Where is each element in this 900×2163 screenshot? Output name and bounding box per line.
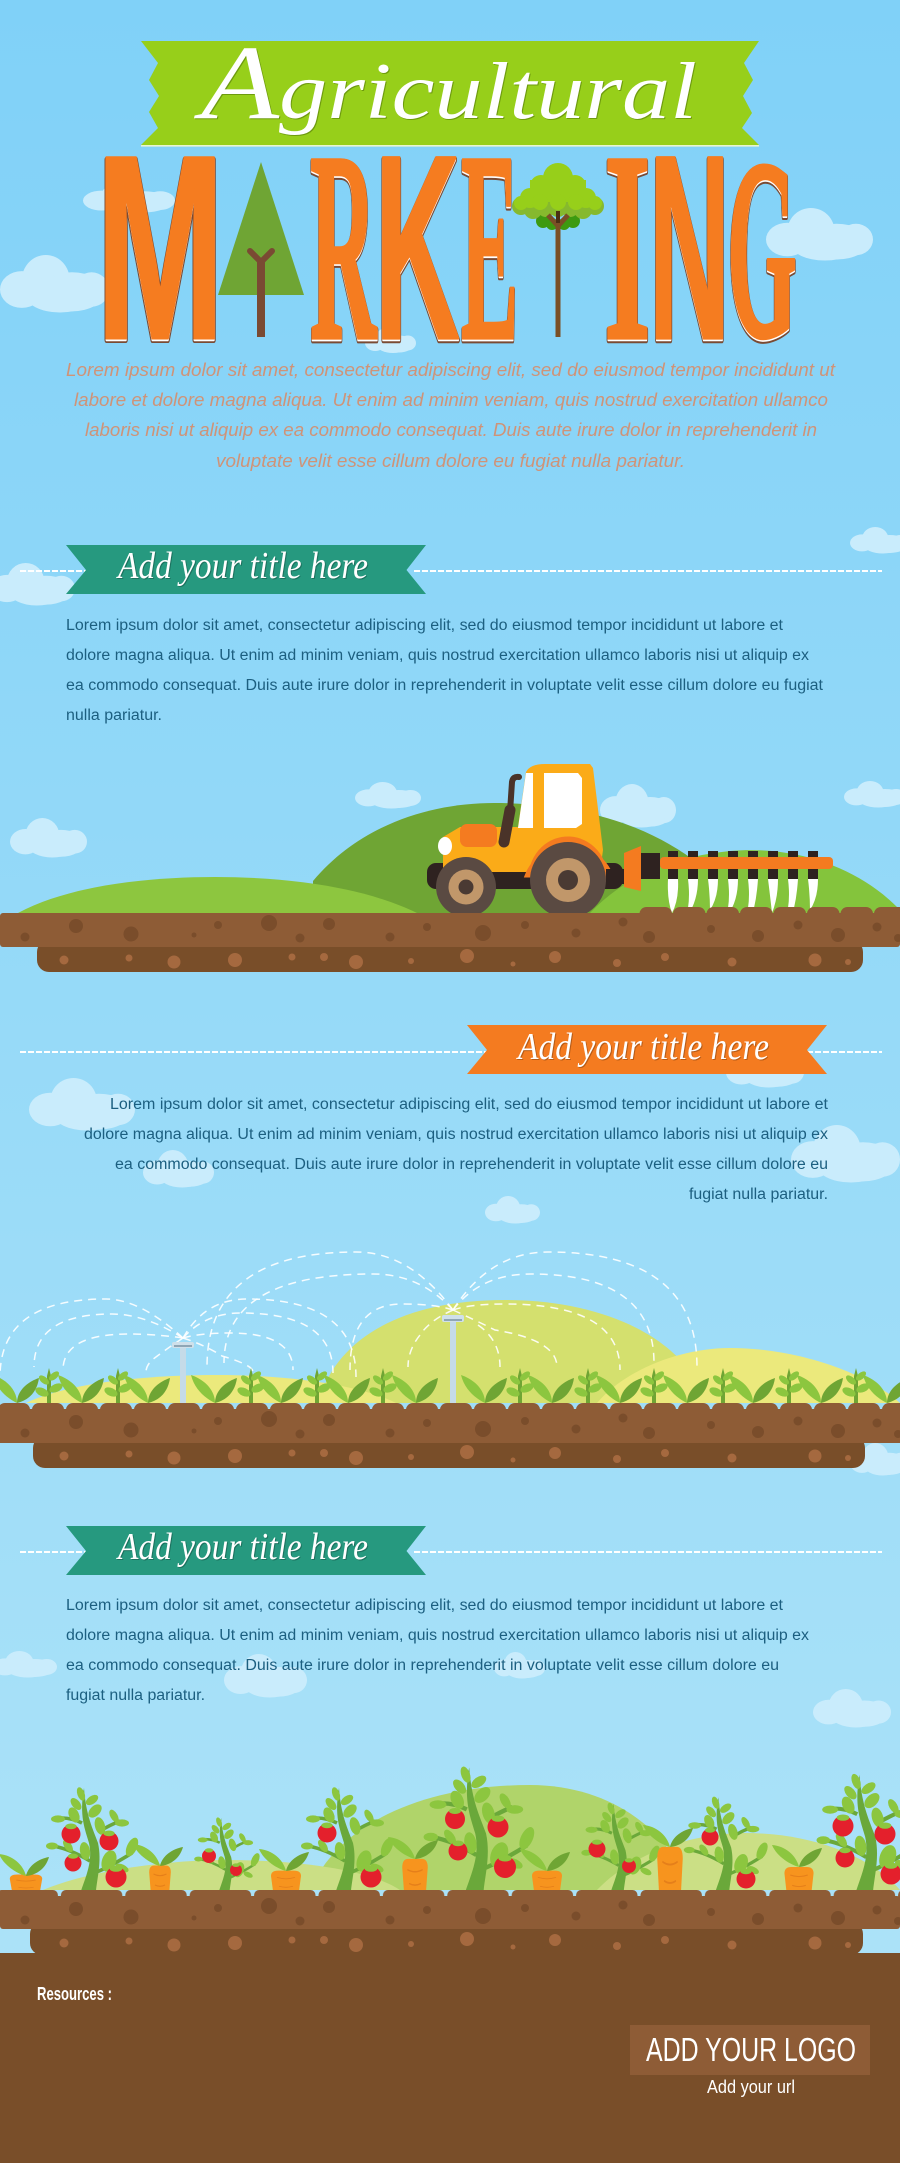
title: MARKETING letters with tree A and T: I xyxy=(604,97,651,398)
seedlings row xyxy=(0,1368,900,1404)
title: MARKETING letters with tree A and T: E xyxy=(461,97,518,399)
soil layers xyxy=(0,907,900,972)
section 2 body text xyxy=(84,1096,829,1203)
section 1 body text xyxy=(66,617,824,724)
title banner xyxy=(141,24,759,147)
soil layers xyxy=(0,1403,900,1468)
section 3 body text: fugiat nulla pariatur. xyxy=(66,1687,205,1704)
footer: resources label: Resources : xyxy=(37,1984,112,2004)
title: MARKETING letters with tree A and T: N xyxy=(649,103,730,396)
hills xyxy=(26,1300,900,1403)
title: MARKETING letters with tree A and T: R xyxy=(310,96,378,397)
title: MARKETING letters with tree A and T xyxy=(96,95,797,400)
title: MARKETING letters with tree A and T: K xyxy=(375,102,459,396)
scene: tractor ploughing field xyxy=(0,764,900,972)
tomatoes xyxy=(62,1808,900,1888)
title: MARKETING letters with tree A and T: M xyxy=(96,100,224,394)
intro paragraph: laboris nisi ut aliquip ex ea commodo consequat. Duis aute irure dolor in reprehenderit in xyxy=(85,420,817,440)
section 1 heading ribbon xyxy=(20,545,882,594)
section 1 body text: dolore magna aliqua. Ut enim ad minim veniam, quis nostrud exercitation ullamco laboris nisi ut aliquip ex xyxy=(66,647,809,664)
icon: tractor with plough xyxy=(427,764,833,918)
icon: sprinklers xyxy=(172,1315,464,1403)
intro paragraph: voluptate velit esse cillum dolore eu fugiat nulla pariatur. xyxy=(216,451,685,471)
hills xyxy=(43,1785,900,1890)
title: MARKETING letters with tree A and T: M xyxy=(96,102,224,396)
intro paragraph xyxy=(66,360,836,471)
section 3 body text: ea commodo consequat. Duis aute irure dolor in reprehenderit in voluptate velit esse cillum dolore eu xyxy=(66,1657,779,1674)
section 1 body text: Lorem ipsum dolor sit amet, consectetur adipiscing elit, sed do eiusmod tempor incididunt ut labore et xyxy=(66,617,784,634)
title: MARKETING letters with tree A and T: E xyxy=(461,95,518,397)
title: MARKETING letters with tree A and T: I xyxy=(604,99,651,400)
title: MARKETING letters with tree A and T: N xyxy=(649,103,730,396)
section 2 body text: fugiat nulla pariatur. xyxy=(689,1186,828,1203)
tomato plants xyxy=(46,1765,900,1891)
carrots xyxy=(0,1825,822,1891)
title: MARKETING letters with tree A and T: K xyxy=(375,102,459,396)
title: MARKETING letters with tree A and T: N xyxy=(649,101,730,394)
section 3 body text: dolore magna aliqua. Ut enim ad minim veniam, quis nostrud exercitation ullamco laboris nisi ut aliquip ex xyxy=(66,1627,809,1644)
title: MARKETING letters with tree A and T: R xyxy=(310,98,378,399)
section 3 body text: Lorem ipsum dolor sit amet, consectetur adipiscing elit, sed do eiusmod tempor incididunt ut labore et xyxy=(66,1597,784,1614)
section 2 body text: dolore magna aliqua. Ut enim ad minim veniam, quis nostrud exercitation ullamco laboris nisi ut aliquip ex xyxy=(84,1126,828,1143)
section 3 body text xyxy=(66,1597,809,1704)
intro paragraph: labore et dolore magna aliqua. Ut enim ad minim veniam, quis nostrud exercitation ullamco xyxy=(74,390,828,410)
section 1 body text: nulla pariatur. xyxy=(66,707,162,724)
soil layers xyxy=(0,1890,900,1955)
section 3 heading ribbon: Add your title here xyxy=(115,1526,368,1568)
script title: Agricultural: Agricultural xyxy=(194,24,697,141)
section 2 body text: Lorem ipsum dolor sit amet, consectetur adipiscing elit, sed do eiusmod tempor incididunt ut labore et xyxy=(110,1096,829,1113)
title: MARKETING letters with tree A and T: G xyxy=(727,106,797,392)
footer: url: Add your url xyxy=(707,2077,795,2097)
section 3 heading ribbon xyxy=(20,1526,882,1575)
footer: logo box xyxy=(630,2025,870,2075)
scene: tomato and carrot garden xyxy=(0,1765,900,1955)
background clouds xyxy=(0,182,900,1728)
section 1 heading ribbon: Add your title here xyxy=(115,545,368,587)
title: MARKETING letters with tree A and T: I xyxy=(604,99,651,400)
title: MARKETING letters with tree A and T: R xyxy=(310,98,378,399)
title: MARKETING letters with tree A and T: M xyxy=(96,102,224,396)
intro paragraph: Lorem ipsum dolor sit amet, consectetur adipiscing elit, sed do eiusmod tempor incididunt ut xyxy=(66,360,836,380)
sprinkler water arcs xyxy=(0,1252,697,1377)
title: MARKETING letters with tree A and T: E xyxy=(461,97,518,399)
hills xyxy=(18,803,900,913)
scene: irrigation sprinklers over seedlings xyxy=(0,1252,900,1468)
title: MARKETING letters with tree A and T: G xyxy=(727,108,797,394)
title: MARKETING letters with tree A and T: G xyxy=(727,108,797,394)
section 2 body text: ea commodo consequat. Duis aute irure dolor in reprehenderit in voluptate velit esse cillum dolore eu xyxy=(115,1156,828,1173)
footer panel xyxy=(0,1953,900,2163)
title: MARKETING letters with tree A and T: K xyxy=(375,100,459,394)
section 1 body text: ea commodo consequat. Duis aute irure dolor in reprehenderit in voluptate velit esse cillum dolore eu fugiat xyxy=(66,677,824,694)
icon: triangle tree as letter A xyxy=(218,162,304,337)
icon: round tree as letter T xyxy=(512,163,604,337)
section 2 heading ribbon: Add your title here xyxy=(515,1026,769,1068)
section 2 heading ribbon xyxy=(20,1025,882,1074)
